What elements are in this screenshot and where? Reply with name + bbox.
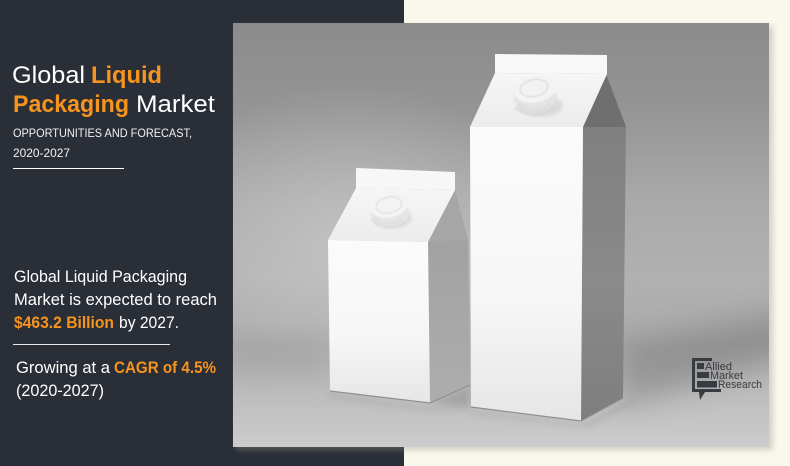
panel: dark left background — [0, 0, 404, 466]
CAGR text — [16, 358, 216, 400]
logo: Allied Market Research — [692, 358, 762, 400]
panel: cream background — [404, 0, 790, 466]
icon: large carton — [470, 54, 626, 421]
market size text: by 2027. — [119, 313, 179, 332]
logo: Allied Market Research: Market — [710, 370, 743, 382]
small carton cap — [368, 189, 412, 229]
market size text: $463.2 Billion — [14, 313, 114, 332]
CAGR text: (2020-2027) — [16, 381, 104, 400]
title: Market — [136, 91, 215, 118]
logo: Allied Market Research: Allied — [705, 361, 732, 373]
title: Packaging — [13, 91, 129, 118]
market size text: Global Liquid Packaging — [14, 267, 187, 286]
market size text — [14, 267, 217, 332]
subtitle — [13, 126, 192, 160]
subtitle: 2020-2027 — [13, 146, 70, 160]
title: Liquid — [91, 62, 162, 89]
subtitle: OPPORTUNITIES AND FORECAST, — [13, 126, 192, 140]
CAGR text: CAGR of 4.5% — [114, 358, 216, 377]
logo: Allied Market Research: Research — [718, 379, 762, 391]
title: Global — [12, 62, 85, 89]
background and floor shadows — [233, 310, 790, 428]
title — [12, 62, 215, 118]
icon: small carton — [328, 168, 470, 403]
CAGR text: Growing at a — [16, 358, 111, 377]
market size text: Market is expected to reach — [14, 290, 217, 309]
panel: product photo — [233, 23, 790, 450]
large carton cap — [511, 72, 563, 117]
